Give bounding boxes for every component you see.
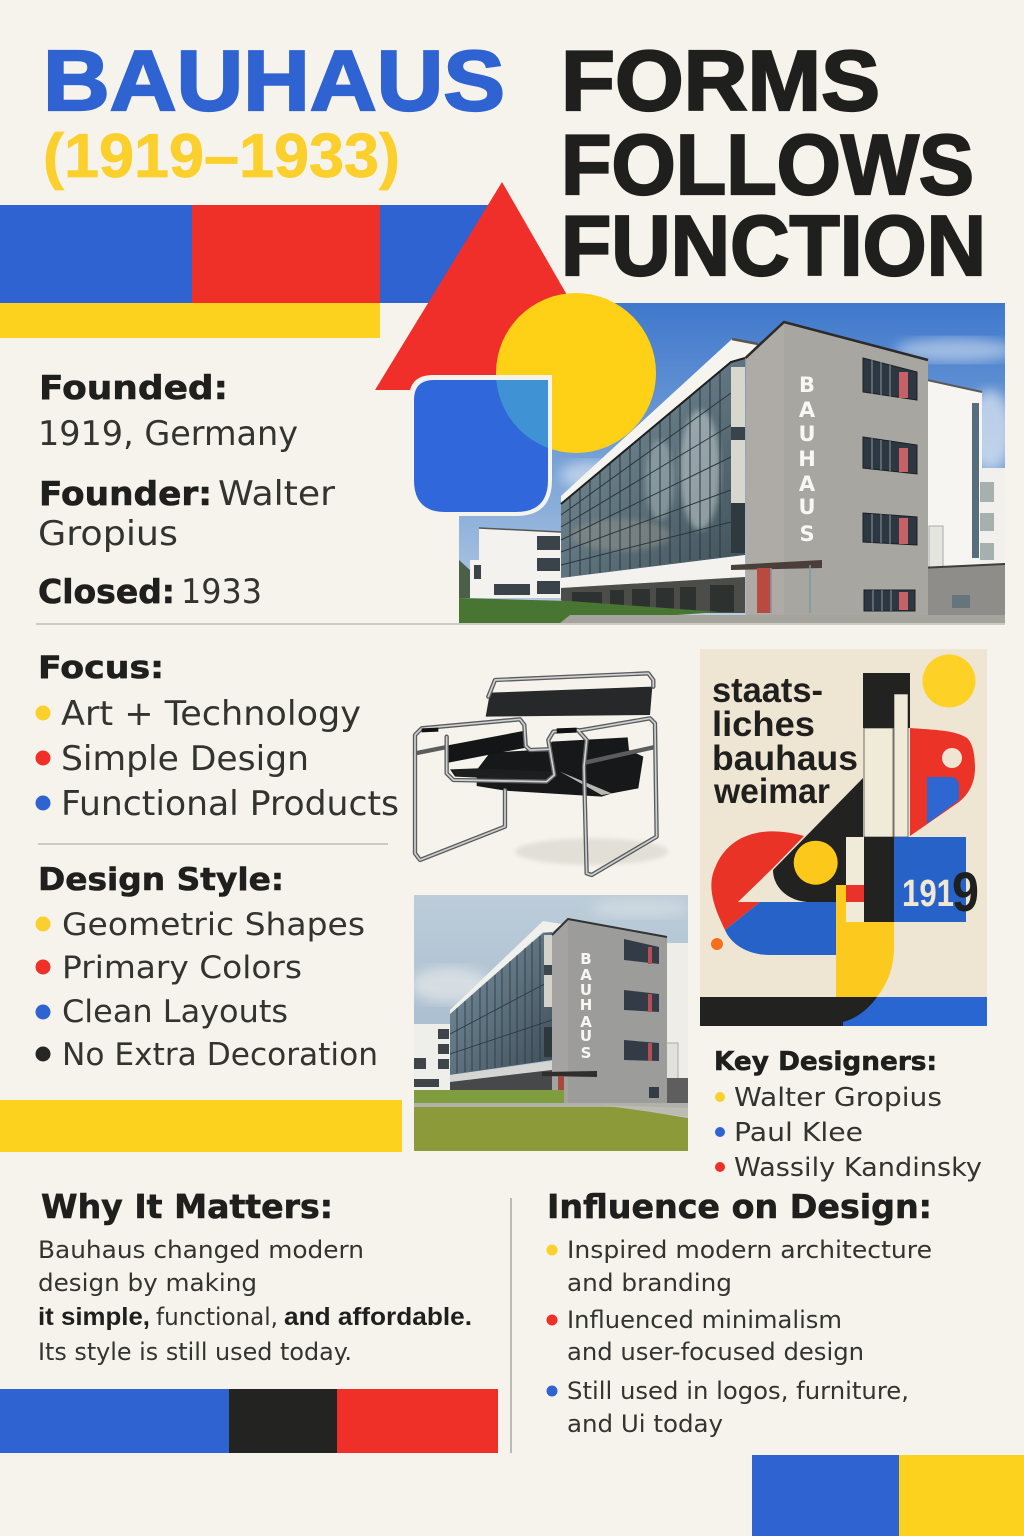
tower lettering: B — [799, 373, 815, 397]
title: years: (1919–1933) — [43, 122, 400, 191]
tower lettering: A — [799, 398, 816, 422]
ground floor — [561, 577, 745, 613]
list: Key Designers: Wassily Kandinsky — [734, 1153, 982, 1183]
text block: Why It Matters: Why It Matters: — [41, 1187, 333, 1226]
text block: Why It Matters: functional, — [156, 1303, 278, 1331]
entrance — [542, 1071, 597, 1077]
list: Design Style: Design Style: — [38, 862, 284, 898]
heading: Forms Follows Function: FOLLOWS — [561, 118, 974, 213]
list: Key Designers: Key Designers: — [714, 1047, 937, 1077]
pale column — [731, 367, 745, 553]
text block: founding facts — [38, 368, 335, 612]
text block: founding facts: Founder: — [39, 474, 212, 513]
low wall — [928, 565, 1005, 615]
right wing — [667, 943, 688, 1078]
heading: Forms Follows Function: FUNCTION — [561, 199, 986, 294]
right wing — [927, 380, 982, 580]
text block: founding facts: Walter — [218, 474, 335, 514]
text block: Influence on Design: Inspired modern architecture — [567, 1236, 932, 1264]
poster base bar — [700, 997, 987, 1026]
glass facade — [561, 358, 745, 578]
text block: Why It Matters: and affordable. — [284, 1303, 472, 1331]
tower lettering: H — [580, 996, 592, 1014]
blue lower shape — [725, 902, 837, 955]
poster heading: staats- — [712, 671, 823, 710]
list: Design Style: Geometric Shapes — [62, 907, 365, 943]
text block: Influence on Design: and branding — [567, 1269, 732, 1297]
tower lettering: U — [580, 1027, 592, 1045]
photo: Bauhaus building second view — [410, 895, 690, 1151]
white band — [561, 555, 745, 588]
shape: blue rounded square — [410, 375, 552, 516]
red left shape — [711, 831, 804, 930]
tower lettering: A — [799, 472, 816, 496]
text block: Influence on Design: and Ui today — [567, 1410, 723, 1438]
list: Focus: Functional Products — [61, 784, 399, 824]
list: Design Style: Primary Colors — [62, 950, 302, 986]
colour blocks: bottom right — [752, 1455, 1024, 1536]
tower lettering: A — [580, 966, 592, 984]
lawn — [414, 1090, 564, 1103]
list: Focus: Art + Technology — [61, 694, 361, 734]
black diagonal shape — [773, 778, 863, 902]
list: Key Designers: Walter Gropius — [734, 1083, 942, 1113]
poster year — [902, 860, 979, 923]
poster: staatliches bauhaus weimar — [700, 649, 987, 1026]
list: Focus — [36, 650, 399, 824]
tower windows — [624, 939, 659, 1098]
text block: Influence on Design: Influenced minimalism — [567, 1306, 842, 1334]
colour bars: bottom left — [0, 1389, 498, 1453]
tower windows — [863, 358, 917, 611]
left wing — [414, 1024, 450, 1090]
tower — [568, 920, 667, 1103]
list: Key Designers — [714, 1047, 982, 1183]
shape: red triangle — [375, 182, 590, 390]
tower lettering: A — [580, 1013, 592, 1031]
poster heading: liches — [712, 705, 815, 744]
red right shape — [910, 728, 975, 836]
text block: Influence on Design — [546, 1187, 932, 1438]
yellow bar — [0, 1100, 402, 1152]
fascia and band — [450, 921, 562, 1014]
tower lettering: S — [581, 1044, 591, 1062]
title: Bauhaus: BAUHAUS — [43, 34, 505, 129]
lawn — [459, 598, 720, 623]
tower — [784, 324, 928, 615]
poster heading: weimar — [713, 772, 830, 811]
tower lettering — [799, 376, 815, 542]
text block: Why It Matters: Bauhaus changed modern — [38, 1236, 364, 1264]
photo: tubular steel chair — [415, 673, 668, 875]
text block: founding facts: 1933 — [181, 572, 262, 612]
text block: Influence on Design: Influence on Design: — [547, 1187, 932, 1226]
list: Design Style: Clean Layouts — [62, 994, 288, 1030]
text block: Why It Matters: it simple, — [38, 1303, 150, 1331]
left wing — [470, 528, 561, 598]
colour bars: top left — [0, 205, 495, 338]
list: Design Style — [36, 862, 378, 1073]
text block: Why It Matters: design by making — [38, 1269, 257, 1297]
tower lettering — [580, 953, 592, 1058]
list: Focus: Simple Design — [61, 739, 309, 779]
tower lettering: U — [798, 422, 816, 446]
list: Focus: Focus: — [38, 650, 164, 686]
text block: founding facts: 1919, Germany — [38, 414, 298, 454]
text block: Influence on Design: Still used in logos, furniture, — [567, 1377, 909, 1405]
text block: founding facts: Closed: — [38, 572, 175, 611]
yellow J shape — [836, 885, 894, 997]
poster heading: bauhaus — [712, 739, 858, 778]
text block: Influence on Design: and user-focused design — [567, 1338, 864, 1366]
text block: Why It Matters: Its style is still used today. — [38, 1338, 352, 1366]
list: Key Designers: Paul Klee — [734, 1118, 863, 1148]
text block: founding facts: Gropius — [38, 514, 178, 554]
roof fascia — [561, 339, 758, 504]
heading: Forms Follows Function: FORMS — [561, 34, 880, 129]
tower lettering: H — [798, 447, 816, 471]
glass facade — [450, 932, 552, 1075]
shape: yellow circle — [496, 293, 656, 453]
central columns — [846, 673, 966, 922]
heading: Forms Follows Function — [561, 34, 986, 294]
tower lettering: S — [799, 522, 815, 546]
tower lettering: U — [580, 981, 592, 999]
poster year: 191 — [902, 873, 954, 915]
tower lettering: B — [580, 950, 592, 968]
text block: Why It Matters — [38, 1187, 472, 1366]
poster year: 9 — [952, 860, 979, 923]
photo: Bauhaus building — [459, 303, 1015, 623]
entrance — [731, 560, 822, 570]
tower lettering: U — [798, 495, 816, 519]
text block: founding facts: Founded: — [39, 368, 228, 407]
poster heading — [712, 671, 858, 811]
list: Design Style: No Extra Decoration — [62, 1037, 378, 1073]
